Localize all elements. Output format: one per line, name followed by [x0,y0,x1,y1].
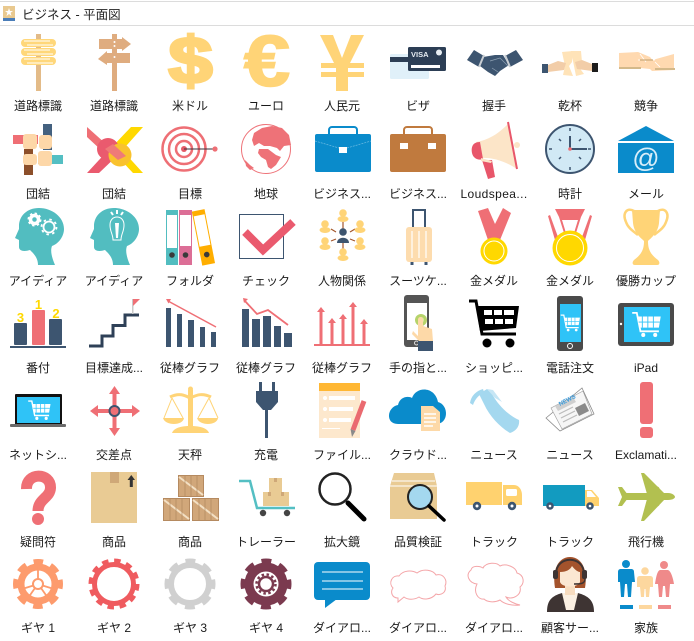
label: ニュース [470,448,518,462]
label: 従棒グラフ [236,361,296,375]
label: 競争 [634,99,658,113]
cell: intersection [90,386,140,462]
icon: brown briefcase [390,127,446,172]
cell: finger and phone [389,295,447,375]
label: チェック [242,274,290,288]
cell: question [20,476,56,549]
label: トラック [470,535,518,549]
label: ダイアロ... [313,620,371,635]
icon: cloud with document [389,389,446,431]
label: Exclamati... [615,448,677,462]
cell: folders [166,209,215,288]
icon: hands tug [619,52,675,71]
icon: credit card: VISA [411,50,429,59]
icon: hand trolley [239,478,295,516]
cell: loudspeaker [460,122,528,201]
icon: euro sign: € [244,20,290,102]
label: ギヤ 4 [249,621,283,635]
icon: trophy [625,210,667,265]
icon: toasting glasses [542,51,598,76]
icon: wooden crates [164,476,218,520]
label: 金メダル [546,273,594,288]
label: 金メダル [470,273,518,288]
icon: power plug [256,382,278,438]
label: 道路標識 [90,98,138,113]
label: 握手 [482,99,506,113]
cell: bar chart 2 [236,298,296,375]
cell: customer support [541,557,599,635]
label: 米ドル [172,99,208,113]
icon: checkbox [240,214,293,258]
cell: visa [390,47,446,113]
icon: blue briefcase [315,127,371,172]
icon: bar chart with zigzag [242,298,292,347]
label: 手の指と... [389,360,447,375]
icon: binders [166,209,215,266]
label: 疑問符 [20,534,56,549]
label: ダイアロ... [465,620,523,635]
cell: ranking [10,297,66,375]
label: 家族 [634,621,658,635]
cell: phone order [546,296,594,375]
cell: ipad [618,303,674,375]
label: 品質検証 [394,534,442,549]
cell: trophy [616,210,676,288]
icon: dollar sign: $ [168,24,213,97]
icon: phone with cart [557,296,583,351]
label: ダイアロ... [389,620,447,635]
icon: handshake [467,50,523,76]
cell: road sign 1 [14,34,62,113]
label: アイディア [9,273,67,288]
label: 充電 [254,448,278,462]
cell: truck 2 [543,485,599,549]
icon: airplane [618,473,675,521]
icon: exclamation mark [640,382,653,438]
icon: medal [478,208,511,264]
label: ビジネス... [389,187,447,201]
label: 交差点 [96,448,132,462]
title: ビジネス - 平面図 [22,8,121,22]
label: クラウド... [389,448,447,462]
icon: yen sign [320,35,364,91]
cell: blue briefcase [313,127,371,201]
icon: orange gear [16,562,60,606]
cell: net shopping [9,394,67,462]
icon: crossing arrows [90,386,140,436]
label: ファイル... [313,448,371,462]
cell: gear 4 [243,561,289,635]
cell: brown briefcase [389,127,447,201]
cell: handshake [467,50,523,113]
cell: dollar [168,24,213,113]
label: 顧客サー... [541,621,599,635]
label: トラック [546,535,594,549]
label: 従棒グラフ [160,361,220,375]
cell: teamwork 2 [87,127,143,201]
cell: gear 2 [91,561,137,635]
icon: target [162,128,218,170]
icon: clock [546,125,594,173]
cell: euro [244,20,290,113]
cell: medal 2 [546,209,594,288]
icon: window icon [3,6,15,21]
cell: idea bulb [85,208,143,288]
label: 団結 [26,187,50,201]
cell: competition [619,52,675,113]
label: ショッピ... [465,361,523,375]
icon: family figures [618,560,674,609]
icon: tablet with cart [618,303,674,346]
label: 優勝カップ [616,273,676,288]
label: 天秤 [178,448,202,462]
label: 道路標識 [14,98,62,113]
icon: arrow bars [314,302,370,346]
label: ビザ [406,99,430,113]
cell: newspaper [546,388,594,462]
cell: clock [546,125,594,201]
label: メール [628,187,664,201]
cell: dialog 1 [313,562,371,635]
cell: toast [542,51,598,113]
icon: road sign [21,34,56,91]
label: 商品 [102,535,126,549]
icon: box with magnifier [390,473,444,520]
cell: medal 1 [470,208,518,288]
label: ギヤ 2 [97,621,131,635]
label: ネットシ... [9,448,67,462]
cell: truck 1 [466,482,522,549]
icon: suitcase [406,210,432,265]
cell: idea gears [9,208,67,288]
label: ギヤ 1 [21,621,55,635]
icon: question mark [26,476,51,525]
cell: bar chart 3 [312,302,372,375]
cell: magnifier [320,474,364,549]
label: 時計 [558,186,582,201]
cell: scale [163,386,218,462]
icon: shopping cart [469,301,519,348]
label: 人民元 [324,99,360,113]
icon: purple gear [243,561,289,607]
icon: balance scale [163,386,218,433]
icon: head with bulb [90,208,139,265]
cell: check [240,214,293,288]
icon: headset agent [547,557,594,612]
icon: large cloud speech bubble [468,563,523,605]
label: トレーラー [236,535,296,549]
cell: bar chart 1 [160,299,220,375]
cell: yuan [320,35,364,113]
label: 目標達成... [85,361,143,375]
label: スーツケ... [389,274,447,288]
label: 乾杯 [558,99,582,113]
icon: yellow truck [466,482,522,510]
icon: red gear [91,561,137,607]
icon: grey gear [167,561,213,607]
label: Loudspea... [460,187,528,201]
label: 拡大鏡 [324,535,360,549]
cell: crates [164,476,218,549]
cell: teamwork 1 [13,124,63,201]
cell: file [313,383,371,462]
icon: descending bar chart [166,299,216,347]
cell: gear 1 [16,562,60,635]
icon: direction sign [98,34,131,91]
icon: podium: 3 [17,310,24,325]
icon: laptop with cart [10,394,66,427]
cell: news roll [470,389,519,462]
cell: mail [618,126,674,201]
icon: cloud speech bubble [391,570,446,602]
cell: relationships [318,209,366,288]
label: iPad [634,361,658,375]
icon: magnifying glass [320,474,364,519]
icon: newspaper: NEWS [558,394,577,408]
icon: podium: 1 [35,297,42,312]
label: 地球 [254,186,278,201]
icon: head with gears [15,208,64,265]
icon: megaphone [472,122,520,179]
label: ビジネス... [313,187,371,201]
label: 目標 [178,187,202,201]
icon: envelope: @ [632,143,660,173]
icon: four hands [13,124,63,175]
icon: people network [320,209,366,261]
label: 番付 [26,361,50,375]
cell: target [162,128,218,201]
icon: podium [10,297,66,348]
cell: goal stairs [85,299,143,375]
icon: file with pencil [319,383,364,438]
label: アイディア [85,273,143,288]
label: ユーロ [248,99,284,113]
cell: quality [390,473,444,549]
title bar [0,1,694,26]
cell: globe [242,124,291,201]
icon: medal with wide ribbon [548,209,592,266]
label: 人物関係 [318,274,366,288]
cell: exclamation [615,382,677,462]
icon: cardboard box [91,472,137,523]
cell: cloud [389,389,447,462]
icon: hand touching phone [404,295,433,351]
cell: suitcase [389,210,447,288]
cell: shopping cart [465,301,523,375]
label: 団結 [102,187,126,201]
cell: trolley [236,478,296,549]
cell: road sign 2 [90,34,138,113]
cell: dialog 3 [465,563,523,635]
label: ギヤ 3 [173,621,207,635]
icon: rolled newspaper [470,389,519,433]
cell: dialog 2 [389,570,447,635]
icon: blue truck [543,485,599,510]
icon: stairs with flag [89,299,140,346]
label: ニュース [546,448,594,462]
cell: family [618,560,674,635]
label: フォルダ [166,273,214,288]
cell: airplane [618,473,675,549]
label: 従棒グラフ [312,361,372,375]
icon: linked rings [87,127,143,173]
cell: charger [254,382,278,462]
icon: podium: 2 [52,306,60,321]
cell: gear 3 [167,561,213,635]
icon: chat bubble [314,562,370,608]
label: 飛行機 [628,535,664,549]
label: 電話注文 [546,361,594,375]
icon: globe [242,124,291,174]
cell: goods box [91,472,137,549]
label: 商品 [178,535,202,549]
